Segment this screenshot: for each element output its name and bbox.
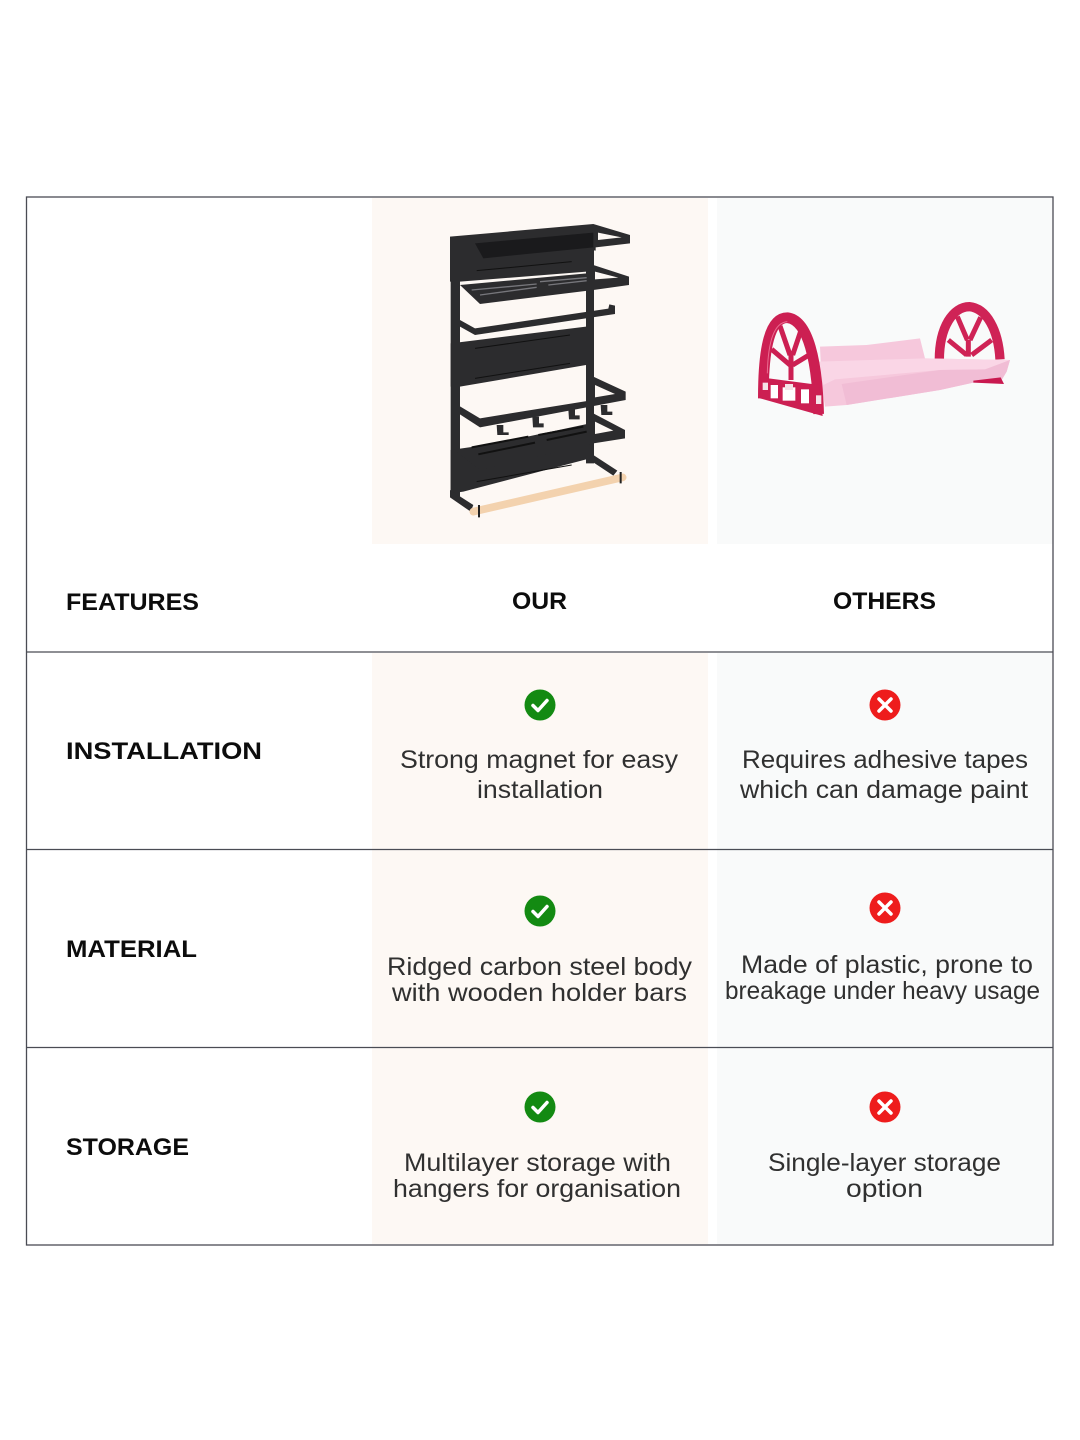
icon: green check, storage bbox=[524, 1092, 556, 1122]
text: others storage: option bbox=[846, 1175, 923, 1203]
header: others: OTHERS bbox=[833, 588, 936, 615]
text: our installation: Strong magnet for easy bbox=[400, 746, 679, 774]
column background: others bbox=[717, 198, 1053, 1244]
product image: pink plastic shelf bbox=[760, 307, 1010, 416]
text: others material: Made of plastic, prone to bbox=[741, 951, 1033, 979]
header: features: FEATURES bbox=[66, 589, 199, 616]
text: our material: with wooden holder bars bbox=[391, 979, 687, 1007]
icon: red cross, installation bbox=[870, 690, 900, 720]
text: our installation: installation bbox=[477, 776, 603, 804]
icon: red cross, material bbox=[870, 892, 900, 924]
header: our: OUR bbox=[512, 588, 567, 615]
icon: green check, installation bbox=[524, 690, 556, 720]
text: our storage: Multilayer storage with bbox=[404, 1149, 671, 1177]
text: others installation: Requires adhesive tapes bbox=[742, 746, 1028, 774]
product image: black magnetic rack bbox=[450, 224, 630, 517]
row label: material: MATERIAL bbox=[66, 936, 197, 963]
text: others installation: which can damage paint bbox=[739, 776, 1028, 804]
icon: green check, material bbox=[524, 896, 556, 926]
table frame bbox=[26, 197, 1053, 1245]
text: our material: Ridged carbon steel body bbox=[387, 953, 693, 981]
row label: storage: STORAGE bbox=[66, 1134, 189, 1161]
text: others storage: Single-layer storage bbox=[768, 1149, 1001, 1177]
column background: our bbox=[372, 198, 708, 1244]
text: our storage: hangers for organisation bbox=[393, 1175, 681, 1203]
row label: installation: INSTALLATION bbox=[66, 738, 262, 765]
icon: red cross, storage bbox=[870, 1092, 900, 1122]
text: others material: breakage under heavy usage bbox=[725, 977, 1040, 1005]
